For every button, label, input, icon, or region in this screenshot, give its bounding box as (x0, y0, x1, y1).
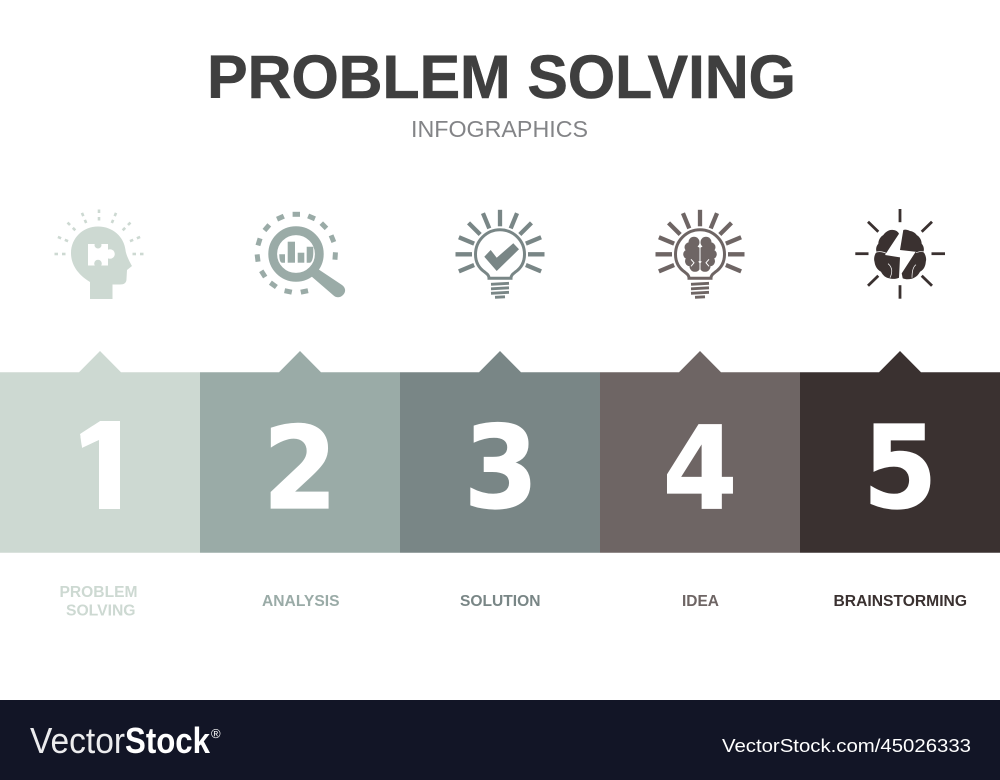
panel: step 1 (0, 351, 200, 553)
number 3: 3 (464, 402, 538, 535)
footer logo: Vector (30, 720, 125, 761)
label: problem solving: SOLVING (66, 602, 136, 620)
panel: step 2 (200, 351, 400, 553)
footer logo: Stock (125, 720, 211, 761)
footer logo: ® (211, 726, 221, 741)
panel: step 5 (800, 351, 1000, 553)
subtitle: INFOGRAPHICS (411, 116, 588, 142)
icon: brain with lightning bolt (855, 209, 945, 299)
number 2: 2 (263, 403, 337, 536)
label: brainstorming: BRAINSTORMING (834, 593, 967, 610)
label: analysis: ANALYSIS (262, 593, 340, 610)
footer logo (30, 720, 221, 761)
panel: step 4 (600, 351, 800, 553)
icon: head with puzzle piece (54, 210, 144, 299)
panel: step 3 (400, 351, 600, 553)
footer bar (0, 700, 1000, 780)
footer image id: VectorStock.com/45026333 (722, 735, 971, 756)
title: PROBLEM SOLVING (207, 43, 796, 111)
icon: light bulb with brain (656, 210, 744, 297)
number 5: 5 (863, 402, 937, 535)
icon: magnifying glass with chart (255, 212, 345, 297)
label: idea: IDEA (682, 593, 719, 610)
number 1: 1 (68, 402, 148, 535)
icon: light bulb with check mark (456, 210, 544, 297)
number 4: 4 (663, 403, 737, 536)
label: solution: SOLUTION (460, 593, 540, 610)
label: problem solving: PROBLEM (60, 584, 138, 601)
label: problem solving (60, 584, 138, 620)
